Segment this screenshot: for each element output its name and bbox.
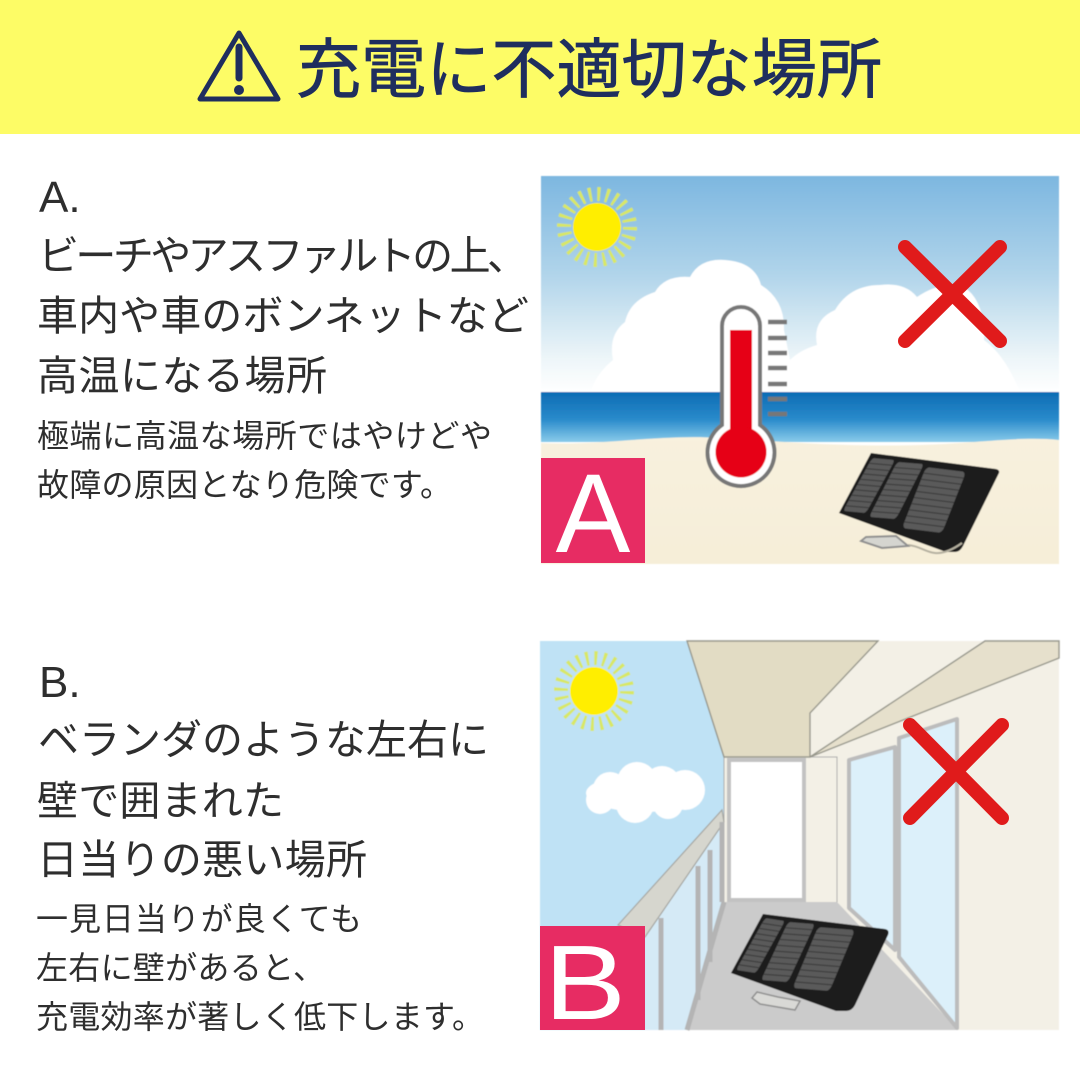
label B: B. [39,658,81,707]
description B: 一見日当りが良くても [36,901,362,937]
sky B [540,641,1059,1030]
icon: sun B [561,658,627,724]
right wall [810,641,1059,1030]
clouds [591,260,1020,392]
heading B: ベランダのような左右に [38,717,489,763]
heading B [37,717,489,883]
heading A: 高温になる場所 [37,353,327,399]
badge A: A [556,451,631,576]
sky [541,176,1059,392]
solar panel A [839,453,999,552]
power bank B [752,992,800,1010]
title: 充電に不適切な場所 [296,33,882,106]
icon: thermometer [708,307,787,486]
floor [687,902,958,1030]
description B [36,901,484,1035]
sand [541,437,1059,564]
icon: warning triangle [200,33,278,99]
badge B: B [544,924,626,1042]
power bank A [861,536,962,553]
heading B: 日当りの悪い場所 [37,837,367,883]
cloud B [586,762,705,823]
description A [37,418,492,503]
windows [849,719,957,1028]
heading A: ビーチやアスファルトの上、 [38,233,528,279]
door [729,760,804,900]
label A: A. [39,173,81,222]
description B: 充電効率が著しく低下します。 [36,999,484,1035]
description B: 左右に壁があると、 [36,950,325,986]
panel: balcony illustration B [540,641,1059,1042]
heading A: 車内や車のボンネットなど [37,293,529,339]
description A: 故障の原因となり危険です。 [37,467,452,503]
panel: case B text [36,658,489,1035]
description A: 極端に高温な場所ではやけどや [37,418,492,454]
cross mark A [905,247,1000,341]
panel: case A text [37,173,529,503]
railing [618,810,724,1030]
beam [810,641,1059,757]
heading A [37,233,529,399]
ceiling [687,641,878,757]
cross mark B [910,725,1002,818]
back wall [724,757,837,903]
sea [541,392,1059,442]
panel: beach illustration A [541,176,1059,576]
heading B: 壁で囲まれた [37,778,284,824]
icon: sun [564,194,630,260]
solar panel B [731,914,889,1011]
title banner [0,0,1080,134]
